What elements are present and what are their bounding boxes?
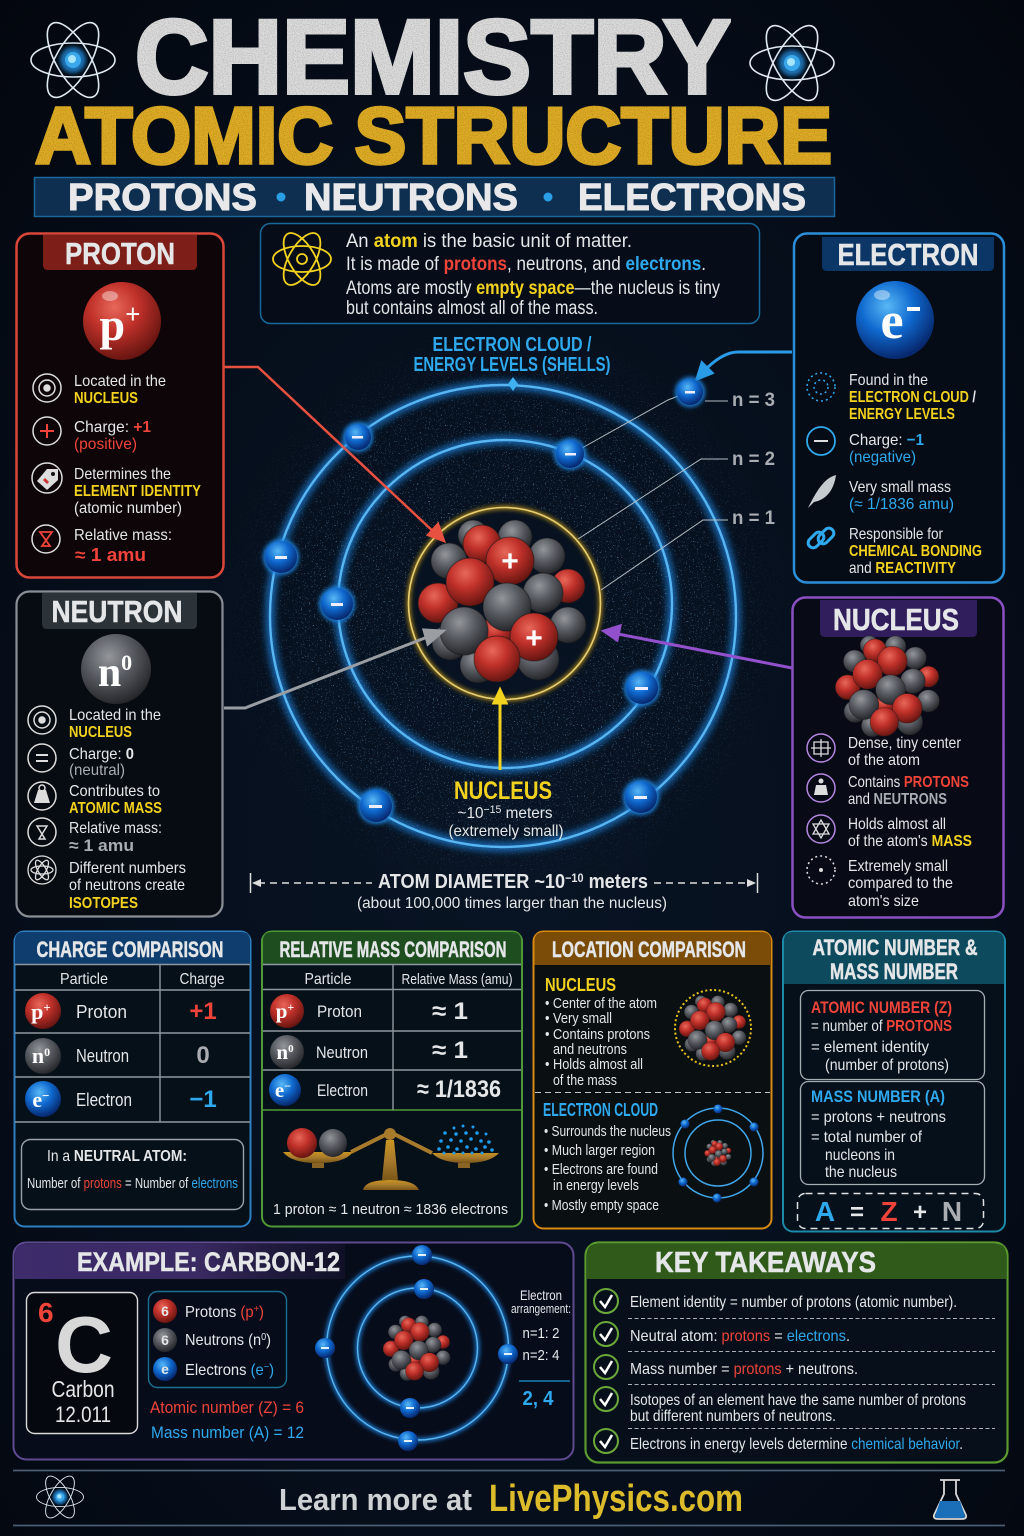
table: Relative Mass (amu) bbox=[402, 971, 512, 988]
icon: footer atom bbox=[36, 1472, 84, 1522]
heading bbox=[15, 932, 250, 964]
electrons bbox=[263, 377, 705, 824]
particle counts: + bbox=[254, 1304, 259, 1315]
panel: charge comparison bbox=[14, 932, 250, 1226]
shell rings bbox=[270, 385, 736, 847]
table: n bbox=[32, 1043, 44, 1068]
particle counts: ) bbox=[259, 1304, 264, 1321]
table: − bbox=[284, 1079, 291, 1093]
panel: carbon example bbox=[14, 1242, 574, 1460]
table: n bbox=[276, 1040, 288, 1064]
heading: ELECTRON bbox=[838, 237, 978, 272]
electron location: ENERGY LEVELS bbox=[849, 406, 955, 423]
nucleus contains: and NEUTRONS bbox=[848, 791, 947, 808]
neutral atom note: Number of protons = Number of electrons bbox=[27, 1175, 238, 1192]
table: ≈ 1 bbox=[432, 1037, 468, 1064]
nucleus mass: Holds almost all bbox=[848, 816, 946, 833]
particle counts: e bbox=[161, 1361, 169, 1377]
atomic number box: ATOMIC NUMBER (Z) bbox=[811, 998, 952, 1017]
proton mass bbox=[32, 525, 172, 565]
shell labels: n = 3 bbox=[732, 390, 775, 411]
panel: proton bbox=[16, 234, 224, 578]
table: Particle bbox=[60, 971, 108, 988]
neutron isotopes: ISOTOPES bbox=[69, 895, 138, 912]
footer bbox=[13, 1470, 1005, 1526]
mass number box: = protons + neutrons bbox=[811, 1109, 946, 1126]
neutron mass: ATOMIC MASS bbox=[69, 800, 162, 817]
heading: ATOMIC NUMBER & bbox=[812, 935, 978, 960]
dimension: atom diameter: (about 100,000 times larger than the nucleus) bbox=[357, 895, 667, 912]
heading: RELATIVE MASS COMPARISON bbox=[280, 937, 506, 962]
panel: location comparison bbox=[534, 932, 772, 1228]
mass number box bbox=[800, 1082, 984, 1184]
intro text: but contains almost all of the mass. bbox=[346, 298, 598, 319]
label: nucleus: meters bbox=[501, 805, 552, 822]
neutron location: NUCLEUS bbox=[69, 724, 132, 741]
balance scale bbox=[283, 1124, 499, 1190]
electron mass: Very small mass bbox=[849, 479, 951, 496]
footer text bbox=[279, 1478, 743, 1520]
electron mass: (≈ 1/1836 amu) bbox=[849, 496, 954, 513]
particle counts: 0 bbox=[261, 1332, 267, 1343]
mass number box: nucleons in bbox=[825, 1147, 895, 1164]
electron arrangement: Electron bbox=[520, 1287, 562, 1303]
arrow: neutron bbox=[224, 630, 443, 708]
neutron mass bbox=[28, 782, 162, 817]
takeaway 3 bbox=[594, 1355, 858, 1379]
table: e bbox=[275, 1078, 284, 1102]
subtitle banner: NEUTRONS bbox=[304, 177, 518, 219]
electron arrangement: 2, 4 bbox=[522, 1388, 554, 1410]
icon: yellow atom bbox=[273, 227, 331, 291]
atomic and mass values: Atomic number (Z) = 6 bbox=[150, 1399, 304, 1417]
electron bonding: and REACTIVITY bbox=[849, 560, 956, 577]
table: + bbox=[43, 1000, 51, 1015]
heading bbox=[587, 1244, 1006, 1279]
takeaway 5 bbox=[594, 1429, 963, 1453]
atomic and mass values: Mass number (A) = 12 bbox=[151, 1424, 304, 1442]
dimension: atom diameter bbox=[250, 871, 758, 912]
table: ≈ 1 bbox=[432, 998, 468, 1025]
neutron location bbox=[28, 706, 161, 741]
intro text: It is made of protons, neutrons, and electrons. bbox=[346, 254, 706, 275]
electron charge bbox=[807, 427, 924, 466]
nucleus dense bbox=[807, 734, 962, 769]
proton identity: Determines the bbox=[74, 466, 171, 483]
nucleus location text bbox=[545, 975, 657, 1089]
electron cloud text: ELECTRON CLOUD bbox=[543, 1100, 658, 1120]
table: ≈ 1/1836 bbox=[417, 1076, 501, 1103]
footer text: LivePhysics.com bbox=[489, 1478, 743, 1520]
table: 0 bbox=[196, 1042, 210, 1069]
header: title block bbox=[31, 0, 834, 219]
heading: EXAMPLE: CARBON-12 bbox=[77, 1247, 340, 1277]
takeaway 4: Isotopes of an element have the same number of protons bbox=[630, 1392, 966, 1409]
nucleus dense: of the atom bbox=[848, 752, 920, 769]
takeaway 3: Mass number = protons + neutrons. bbox=[630, 1361, 858, 1378]
particle counts: Protons (p bbox=[185, 1304, 255, 1321]
electron arrangement: n=1: 2 bbox=[522, 1325, 560, 1342]
neutral atom note bbox=[22, 1140, 244, 1210]
heading: PROTON bbox=[65, 236, 175, 271]
panel: atomic and mass number bbox=[783, 932, 1005, 1232]
dimension: atom diameter: ATOM DIAMETER ~10 bbox=[378, 871, 585, 893]
proton identity bbox=[32, 463, 201, 517]
electron charge: Charge: −1 bbox=[849, 432, 924, 449]
label: electron cloud: ELECTRON CLOUD / bbox=[432, 334, 592, 356]
arrow: proton bbox=[224, 367, 444, 541]
table: e bbox=[32, 1087, 42, 1112]
proton charge: (positive) bbox=[74, 436, 137, 453]
electron location bbox=[807, 372, 976, 423]
nucleus mass: of the atom's MASS bbox=[848, 833, 972, 850]
arrow: nucleus yellow bbox=[494, 690, 506, 770]
proton mass: Relative mass: bbox=[74, 527, 172, 544]
heading: MASS NUMBER bbox=[830, 959, 958, 984]
table: + bbox=[287, 1000, 294, 1014]
shell labels: n = 2 bbox=[732, 449, 775, 470]
equation: A bbox=[815, 1196, 835, 1227]
proton charge: Charge: +1 bbox=[74, 419, 151, 436]
heading bbox=[534, 932, 771, 965]
particle counts bbox=[148, 1292, 286, 1388]
atomic number box: = element identity bbox=[811, 1039, 929, 1056]
neutron charge bbox=[28, 744, 134, 779]
table: 0 bbox=[288, 1043, 294, 1055]
nucleus location text: NUCLEUS bbox=[545, 975, 616, 995]
takeaway 2 bbox=[594, 1322, 850, 1346]
icon: right atom bbox=[750, 18, 834, 108]
electron cloud text: in energy levels bbox=[553, 1178, 639, 1194]
arrow: electron bbox=[697, 352, 792, 379]
neutron mass: Contributes to bbox=[69, 783, 160, 800]
nucleus cluster bbox=[418, 520, 586, 683]
nucleus location text: • Contains protons bbox=[545, 1027, 650, 1043]
takeaway 1 bbox=[594, 1289, 957, 1313]
equation: + bbox=[913, 1199, 927, 1226]
icon: neutron sphere: 0 bbox=[121, 650, 132, 675]
icon: flask bbox=[934, 1480, 966, 1519]
atom diagram bbox=[215, 322, 795, 912]
heading bbox=[784, 932, 1004, 984]
label: nucleus: ~10 bbox=[458, 805, 485, 822]
subtitle banner bbox=[34, 177, 834, 219]
icon: electron sphere: e bbox=[880, 293, 904, 350]
equation: N bbox=[942, 1196, 962, 1227]
intro text: An atom is the basic unit of matter. bbox=[346, 231, 632, 252]
atomic number box: (number of protons) bbox=[825, 1057, 949, 1074]
dimension: atom diameter: meters bbox=[584, 871, 648, 893]
icon: proton sphere bbox=[83, 282, 161, 360]
electron arrangement bbox=[511, 1287, 571, 1410]
nucleus size bbox=[807, 856, 953, 910]
panel: electron bbox=[794, 234, 1004, 582]
equation: Z bbox=[880, 1196, 898, 1227]
electron arrangement: n=2: 4 bbox=[522, 1347, 560, 1364]
table: Electron bbox=[76, 1090, 132, 1110]
electron location: Found in the bbox=[849, 372, 928, 389]
table: +1 bbox=[189, 998, 217, 1025]
icon: proton sphere: p bbox=[100, 299, 125, 350]
equation bbox=[798, 1194, 984, 1228]
table: − bbox=[42, 1088, 50, 1103]
atomic and mass values bbox=[150, 1399, 304, 1442]
neutron isotopes: Different numbers bbox=[69, 860, 186, 877]
label: nucleus: −15 bbox=[484, 804, 501, 816]
mass caption: 1 proton ≈ 1 neutron ≈ 1836 electrons bbox=[273, 1201, 508, 1218]
equation: = bbox=[850, 1199, 864, 1226]
label lines bbox=[578, 394, 728, 590]
proton location: Located in the bbox=[74, 373, 166, 390]
electron cloud text bbox=[543, 1100, 671, 1214]
label: nucleus bbox=[448, 777, 564, 840]
neutron relative mass: ≈ 1 amu bbox=[69, 836, 134, 855]
nucleus cluster: + bbox=[501, 545, 519, 578]
nucleus cluster: + bbox=[525, 622, 543, 655]
neutron location: Located in the bbox=[69, 707, 161, 724]
title: atomic structure: ATOMIC STRUCTURE bbox=[35, 91, 832, 180]
table: Charge bbox=[180, 971, 225, 988]
atomic number box bbox=[800, 990, 984, 1080]
nucleus dense: Dense, tiny center bbox=[848, 735, 962, 752]
panel: relative mass comparison bbox=[262, 932, 522, 1226]
takeaway 4: but different numbers of neutrons. bbox=[630, 1408, 836, 1425]
neutron isotopes: of neutrons create bbox=[69, 877, 185, 894]
icon: mini atom bbox=[673, 1104, 763, 1202]
element tile: 6 bbox=[38, 1297, 54, 1328]
label: electron cloud bbox=[414, 334, 610, 376]
proton charge bbox=[33, 417, 151, 453]
nucleus mass bbox=[807, 815, 972, 850]
neutron charge: Charge: 0 bbox=[69, 746, 134, 763]
element tile: 12.011 bbox=[55, 1402, 111, 1427]
takeaway 4 bbox=[594, 1387, 966, 1425]
electron arrangement: arrangement: bbox=[511, 1301, 571, 1316]
heading: CHARGE COMPARISON bbox=[36, 937, 224, 962]
electron cloud text: • Much larger region bbox=[544, 1143, 655, 1159]
panel: neutron bbox=[16, 592, 222, 916]
takeaway 2: Neutral atom: protons = electrons. bbox=[630, 1328, 850, 1345]
table: −1 bbox=[189, 1086, 217, 1113]
subtitle banner: ELECTRONS bbox=[578, 177, 806, 219]
particle counts: − bbox=[264, 1362, 269, 1373]
neutron relative mass: Relative mass: bbox=[69, 820, 162, 837]
panel: nucleus bbox=[792, 598, 1004, 918]
element tile: Carbon bbox=[52, 1376, 114, 1402]
proton identity: (atomic number) bbox=[74, 500, 182, 517]
label: nucleus: NUCLEUS bbox=[454, 777, 552, 805]
icon: neutron sphere bbox=[81, 634, 151, 704]
proton identity: ELEMENT IDENTITY bbox=[74, 483, 201, 500]
icon: neutron sphere: n bbox=[98, 650, 121, 696]
heading: NUCLEUS bbox=[833, 602, 959, 637]
title: chemistry: CHEMISTRY bbox=[135, 0, 731, 116]
label: electron cloud: ENERGY LEVELS (SHELLS) bbox=[414, 354, 610, 376]
icon: electron sphere bbox=[856, 281, 934, 359]
nucleus location text: of the mass bbox=[553, 1073, 617, 1089]
table: Neutron bbox=[76, 1046, 129, 1066]
icon: nucleus cluster bbox=[835, 636, 939, 737]
nucleus contains: Contains PROTONS bbox=[848, 774, 969, 791]
electron cloud text: • Electrons are found bbox=[544, 1162, 658, 1178]
table: p bbox=[31, 999, 43, 1024]
particle counts: ) bbox=[266, 1332, 271, 1349]
heading: LOCATION COMPARISON bbox=[552, 937, 746, 962]
neutron charge: (neutral) bbox=[69, 762, 125, 779]
particle counts: Electrons (e bbox=[185, 1362, 265, 1379]
dimension: atom diameter: −10 bbox=[565, 871, 584, 885]
heading: NEUTRON bbox=[52, 594, 182, 629]
takeaway 1: Element identity = number of protons (atomic number). bbox=[630, 1294, 957, 1311]
intro text: Atoms are mostly empty space—the nucleus is tiny bbox=[346, 278, 720, 299]
element tile bbox=[26, 1292, 138, 1434]
electron cloud text: • Mostly empty space bbox=[544, 1198, 659, 1214]
nucleus size: Extremely small bbox=[848, 858, 948, 875]
mass number box: the nucleus bbox=[825, 1164, 897, 1181]
electron cloud text: • Surrounds the nucleus bbox=[544, 1124, 671, 1140]
panel: key takeaways bbox=[586, 1242, 1008, 1462]
icon: proton sphere: + bbox=[125, 299, 140, 329]
particle counts: 6 bbox=[161, 1303, 169, 1319]
heading bbox=[15, 1244, 345, 1279]
element tile: C bbox=[55, 1300, 113, 1389]
proton mass: ≈ 1 amu bbox=[75, 545, 146, 565]
electron charge: (negative) bbox=[849, 449, 916, 466]
electron mass bbox=[808, 475, 954, 513]
table: Proton bbox=[76, 1002, 127, 1022]
label: nucleus: (extremely small) bbox=[448, 823, 564, 840]
panel: intro bbox=[260, 224, 760, 324]
particle counts: 6 bbox=[161, 1332, 169, 1348]
nucleus location text: • Center of the atom bbox=[545, 996, 657, 1012]
atomic number box: = number of PROTONS bbox=[811, 1018, 952, 1035]
nucleus location text: • Very small bbox=[545, 1011, 612, 1027]
neutral atom note: In a NEUTRAL ATOM: bbox=[47, 1148, 187, 1165]
neutron isotopes bbox=[28, 856, 186, 912]
mass number box: = total number of bbox=[811, 1129, 923, 1146]
shell labels: n = 1 bbox=[732, 508, 775, 529]
particle counts: ) bbox=[269, 1362, 274, 1379]
neutron relative mass bbox=[28, 818, 162, 855]
intro text bbox=[346, 231, 720, 319]
proton location bbox=[33, 373, 166, 407]
heading bbox=[263, 932, 521, 964]
shell labels bbox=[732, 390, 775, 529]
electron location: ELECTRON CLOUD / bbox=[849, 389, 976, 406]
icon: left atom bbox=[31, 15, 115, 105]
nucleus size: compared to the bbox=[848, 875, 953, 892]
table: Particle bbox=[304, 971, 352, 988]
table: 0 bbox=[44, 1045, 50, 1059]
icon: nucleus in dotted ring bbox=[675, 990, 751, 1066]
electron pile bbox=[437, 1124, 494, 1154]
electron bonding: Responsible for bbox=[849, 526, 944, 543]
footer text: Learn more at bbox=[279, 1482, 472, 1517]
table: Neutron bbox=[316, 1044, 368, 1062]
mass number box: MASS NUMBER (A) bbox=[811, 1087, 945, 1106]
table: Proton bbox=[317, 1003, 362, 1021]
heading: KEY TAKEAWAYS bbox=[655, 1247, 876, 1279]
table bbox=[15, 964, 250, 1122]
table: Electron bbox=[317, 1082, 368, 1100]
nucleus location text: • Holds almost all bbox=[545, 1057, 643, 1073]
speckled cloud bbox=[215, 322, 795, 902]
nucleus location text: and neutrons bbox=[553, 1042, 627, 1058]
carbon atom diagram bbox=[315, 1245, 518, 1451]
electron bonding: CHEMICAL BONDING bbox=[849, 543, 982, 560]
table bbox=[263, 964, 521, 1110]
particle counts: Neutrons (n bbox=[185, 1332, 269, 1349]
subtitle banner: PROTONS bbox=[68, 177, 257, 219]
table: p bbox=[276, 999, 287, 1023]
takeaway 5: Electrons in energy levels determine chemical behavior. bbox=[630, 1436, 963, 1453]
electron bonding bbox=[806, 526, 982, 577]
shell diamond marker bbox=[508, 377, 518, 391]
nucleus size: atom's size bbox=[848, 893, 919, 910]
arrow: nucleus purple bbox=[604, 626, 792, 668]
proton location: NUCLEUS bbox=[74, 390, 138, 407]
nucleus contains bbox=[807, 774, 969, 808]
